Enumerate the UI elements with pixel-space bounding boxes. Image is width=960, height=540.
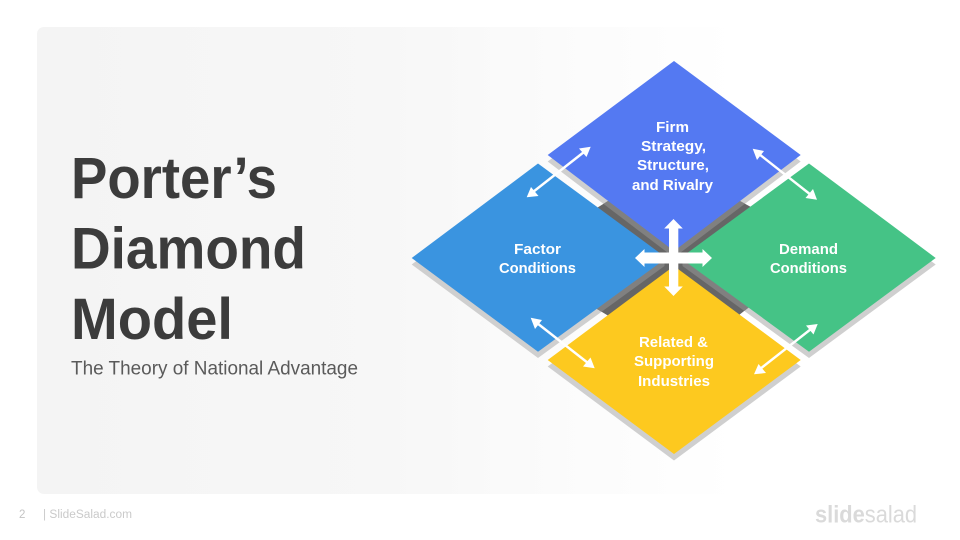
label: firm strategy: and Rivalry	[632, 178, 713, 194]
arrow: firm to factor	[527, 147, 591, 197]
diamond: demand conditions	[682, 164, 936, 352]
label: factor conditions: Conditions	[499, 261, 576, 277]
diamond: factor conditions	[412, 164, 664, 352]
footer site name: | SlideSalad.com	[43, 509, 132, 521]
label: factor conditions: Factor	[514, 242, 561, 258]
label: firm strategy: Structure,	[637, 158, 709, 174]
diamond diagram	[412, 61, 936, 460]
label: related and supporting industries: Industries	[638, 374, 710, 390]
background panel	[37, 27, 737, 494]
arrow: centre four-way	[635, 219, 712, 296]
logo wordmark: slidesalad	[815, 502, 917, 528]
label: firm strategy: Firm	[656, 120, 689, 136]
label: related and supporting industries: Related &	[639, 335, 709, 351]
arrow: demand to related	[754, 324, 818, 374]
label: firm strategy: Strategy,	[641, 139, 706, 155]
subtitle: The Theory of National Advantage	[71, 358, 358, 380]
title: Diamond	[71, 216, 306, 282]
label: related and supporting industries	[634, 335, 714, 390]
label: demand conditions: Demand	[779, 242, 838, 258]
label: demand conditions	[770, 242, 847, 277]
dark centre cross	[591, 198, 755, 320]
diamond: firm strategy	[548, 61, 801, 251]
arrow: factor to related	[531, 318, 595, 368]
title	[71, 146, 306, 352]
label: factor conditions	[499, 242, 576, 277]
title: Porter’s	[71, 146, 277, 211]
label: related and supporting industries: Supporting	[634, 354, 714, 370]
arrow: firm to demand	[753, 149, 817, 200]
title: Model	[71, 287, 233, 352]
light shadows	[412, 68, 936, 460]
label: firm strategy	[632, 120, 713, 194]
dark shadow strips	[597, 201, 748, 312]
diamond: related and supporting industries	[548, 266, 801, 454]
label: demand conditions: Conditions	[770, 261, 847, 277]
page number: 2	[19, 509, 25, 521]
